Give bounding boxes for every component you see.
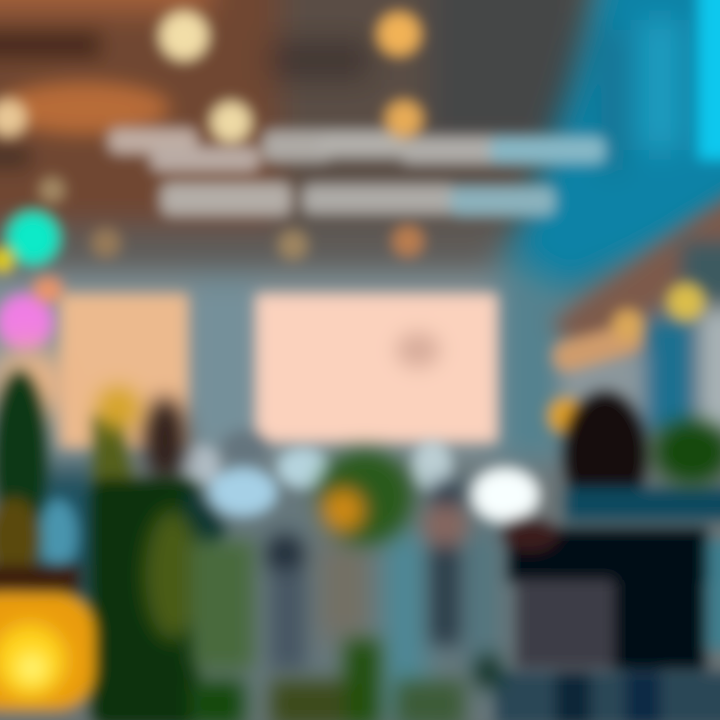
plants (0, 370, 228, 720)
audience floor (30, 470, 510, 720)
audience figures (143, 398, 469, 670)
central screen (256, 294, 497, 442)
title (text illegible in the reference; drawn as blurred bands) (108, 128, 606, 216)
foreground person and seat (495, 391, 720, 720)
ceiling lights (0, 11, 424, 260)
ceiling beams and wood accents (0, 32, 170, 168)
right wall lamps (548, 283, 705, 434)
foreground foliage (96, 386, 720, 720)
laptops and glowing shirts (38, 430, 539, 571)
wooden right structure (550, 165, 720, 430)
bright cyan strip (698, 0, 720, 160)
teal wall panels (510, 0, 720, 290)
ceiling (0, 0, 600, 275)
left screen (60, 294, 188, 448)
back wall (0, 250, 570, 465)
glowing yellow lamp (0, 592, 96, 710)
projection screens (60, 294, 497, 448)
left neon icons (0, 211, 70, 423)
